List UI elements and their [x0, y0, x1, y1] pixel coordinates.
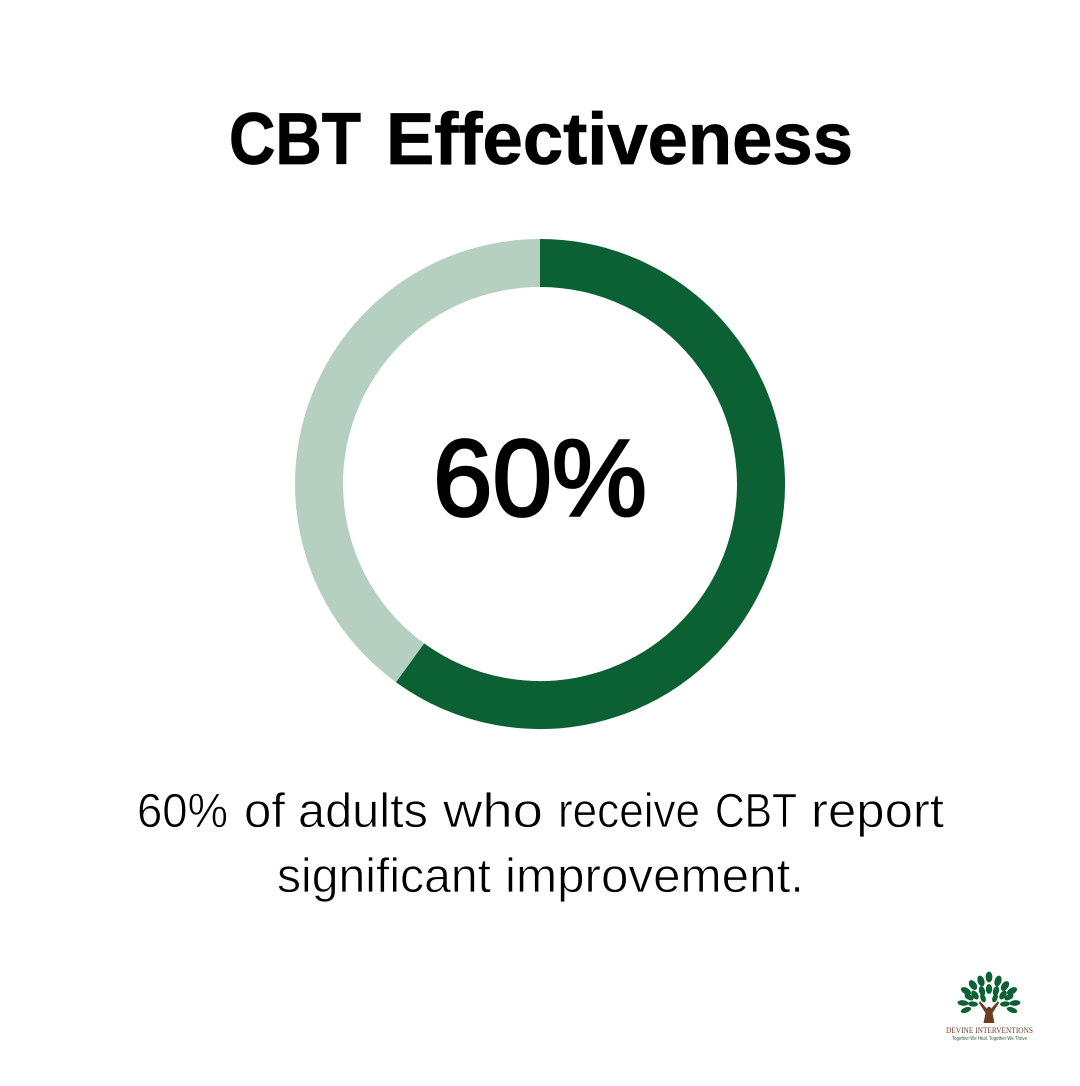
description text: improvement.	[505, 850, 804, 903]
description text: of	[244, 785, 286, 838]
description text	[137, 785, 944, 903]
title: Effectiveness	[386, 99, 853, 180]
description text: 60%	[137, 785, 228, 838]
description text: receive	[558, 785, 700, 838]
icon: tree leaves	[957, 972, 1021, 1014]
description text: report	[811, 785, 944, 838]
description text: significant	[277, 850, 491, 903]
description text: CBT	[715, 785, 797, 838]
logo tagline: Together We Heal. Together We Thrive	[952, 1036, 1027, 1042]
icon: figure trunk	[979, 1001, 999, 1023]
logo name: DEVINE INTERVENTIONS	[946, 1026, 1033, 1035]
title: CBT	[229, 99, 361, 180]
description text: who	[442, 785, 543, 838]
center percentage: 60%	[433, 418, 647, 540]
donut value segment	[410, 263, 761, 705]
logo: Devine Interventions	[946, 972, 1033, 1042]
donut chart: 60%	[319, 263, 761, 705]
description text: adults	[298, 785, 428, 838]
donut remainder segment	[319, 263, 540, 663]
